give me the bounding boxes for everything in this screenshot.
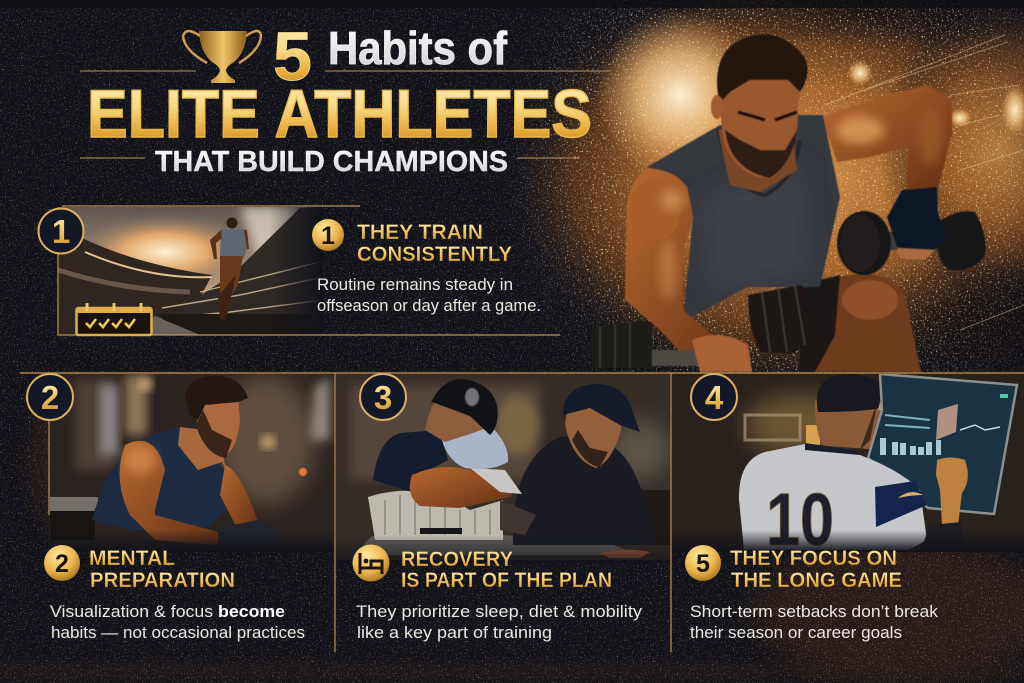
number badge 2 (27, 374, 73, 420)
number badge 1: 1 (52, 213, 70, 250)
number badge 4: 4 (705, 379, 724, 416)
hero sparks texture (494, 0, 1024, 374)
hero athlete with dumbbells (590, 34, 986, 372)
small badge 1: 1 (321, 222, 335, 250)
arm with lower dumbbell (625, 168, 750, 367)
number badge 3: 3 (374, 379, 392, 416)
small badge 5 (685, 545, 721, 581)
heading: THEY TRAIN (357, 221, 483, 244)
title line 1: Habits of (328, 22, 508, 74)
top dark band (0, 0, 1024, 8)
panel photo: analytics (672, 374, 1024, 561)
habit 2 (27, 374, 305, 642)
heading: IS PART OF THE PLAN (401, 569, 612, 592)
tank top (647, 115, 840, 322)
body text: Routine remains steady in (317, 276, 513, 294)
small badge 2 (44, 545, 80, 581)
heading (357, 221, 512, 266)
title number 5: 5 (273, 18, 312, 95)
heading: THEY FOCUS ON (730, 547, 897, 570)
lower dumbbell (590, 285, 820, 372)
athlete (92, 376, 276, 548)
body text (50, 603, 305, 642)
panel photo: recovery (336, 374, 671, 560)
panel photo: runner in stadium (58, 207, 323, 335)
number badge 4 (691, 374, 737, 420)
subtitle: THAT BUILD CHAMPIONS (155, 146, 508, 178)
heading: MENTAL (89, 547, 175, 570)
small badge 2: 2 (55, 550, 69, 578)
upper dumbbell and glove (837, 187, 986, 275)
small badge 1 (312, 219, 344, 251)
runner (210, 218, 249, 320)
body text: Visualization & focus become (50, 603, 285, 621)
body text: Short-term setbacks don’t break (690, 603, 939, 621)
heading (401, 548, 612, 592)
number badge 3 (360, 374, 406, 420)
raised arm (822, 85, 952, 193)
neck and head (718, 115, 797, 192)
heading (730, 547, 902, 592)
number badge 2: 2 (41, 379, 59, 416)
title line 2: ELITE ATHLETES (87, 76, 592, 152)
panel frame lines (20, 206, 1024, 652)
icon: calendar (76, 303, 152, 335)
panel photo: analytics: 10 (766, 478, 834, 561)
heading (89, 547, 235, 592)
body text: offseason or day after a game. (317, 297, 541, 315)
heading: CONSISTENTLY (357, 243, 512, 266)
body text (690, 603, 939, 642)
small badge 5: 5 (696, 550, 710, 578)
leg (810, 274, 921, 372)
body text: They prioritize sleep, diet & mobility (356, 603, 643, 621)
number badge 1 (38, 208, 84, 254)
title block (80, 18, 610, 178)
heading: RECOVERY (401, 548, 513, 571)
body text: habits — not occasional practices (51, 624, 305, 642)
heading: THE LONG GAME (731, 569, 902, 592)
body text (317, 276, 541, 315)
habit 1 (38, 208, 541, 335)
body text (356, 603, 643, 642)
icon: trophy (183, 31, 261, 83)
heading: PREPARATION (90, 569, 235, 592)
body text: like a key part of training (357, 624, 552, 642)
icon: bed badge (352, 544, 390, 582)
panel photo: mental preparation (49, 374, 335, 550)
habit 3 (352, 374, 643, 642)
body text: their season or career goals (690, 624, 902, 642)
habit 4 (685, 374, 939, 642)
